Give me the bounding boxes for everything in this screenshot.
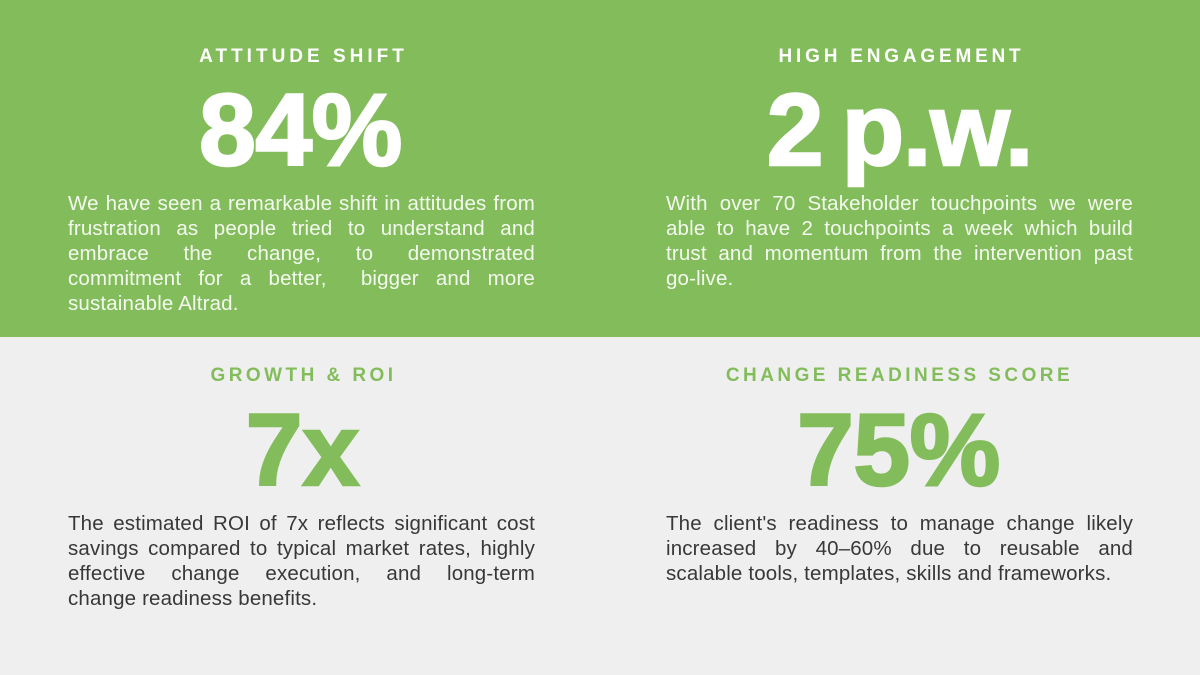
panel: green top band: [0, 0, 1200, 337]
heading: attitude shift: ATTITUDE SHIFT: [199, 46, 408, 67]
text: attitude shift description: commitment for a better, bigger and more: [68, 267, 535, 290]
text: attitude shift description: embrace the change, to demonstrated: [68, 242, 535, 265]
text: high engagement description: With over 70 Stakeholder touchpoints we were: [666, 192, 1133, 215]
text: growth and ROI description: savings compared to typical market rates, highly: [68, 537, 535, 560]
text: high engagement description: go-live.: [666, 267, 733, 290]
stat: 2 p.w.: 2 p.w.: [767, 73, 1032, 187]
text: high engagement description: trust and momentum from the intervention past: [666, 242, 1133, 265]
heading: growth and ROI: GROWTH & ROI: [210, 365, 396, 386]
text: change readiness description: The client's readiness to manage change likely: [666, 512, 1133, 535]
heading: high engagement: HIGH ENGAGEMENT: [779, 46, 1024, 67]
text: high engagement description: [666, 192, 1133, 290]
stat: 7x: 7x: [246, 393, 359, 507]
text: change readiness description: increased by 40–60% due to reusable and: [666, 537, 1133, 560]
text: attitude shift description: We have seen a remarkable shift in attitudes from: [68, 192, 535, 215]
heading: change readiness score: CHANGE READINESS SCORE: [726, 365, 1073, 386]
text: attitude shift description: frustration as people tried to understand and: [68, 217, 535, 240]
text: growth and ROI description: The estimated ROI of 7x reflects significant cost: [68, 512, 535, 535]
text: change readiness description: scalable tools, templates, skills and frameworks.: [666, 562, 1111, 585]
text: growth and ROI description: [68, 512, 535, 610]
text: high engagement description: able to have 2 touchpoints a week which build: [666, 217, 1133, 240]
stat: 75%: 75%: [797, 393, 1000, 507]
text: attitude shift description: sustainable Altrad.: [68, 292, 239, 315]
stat: 84%: 84%: [199, 73, 402, 187]
text: growth and ROI description: effective change execution, and long-term: [68, 562, 535, 585]
text: attitude shift description: [68, 192, 535, 315]
text: growth and ROI description: change readiness benefits.: [68, 587, 317, 610]
text: change readiness description: [666, 512, 1133, 585]
